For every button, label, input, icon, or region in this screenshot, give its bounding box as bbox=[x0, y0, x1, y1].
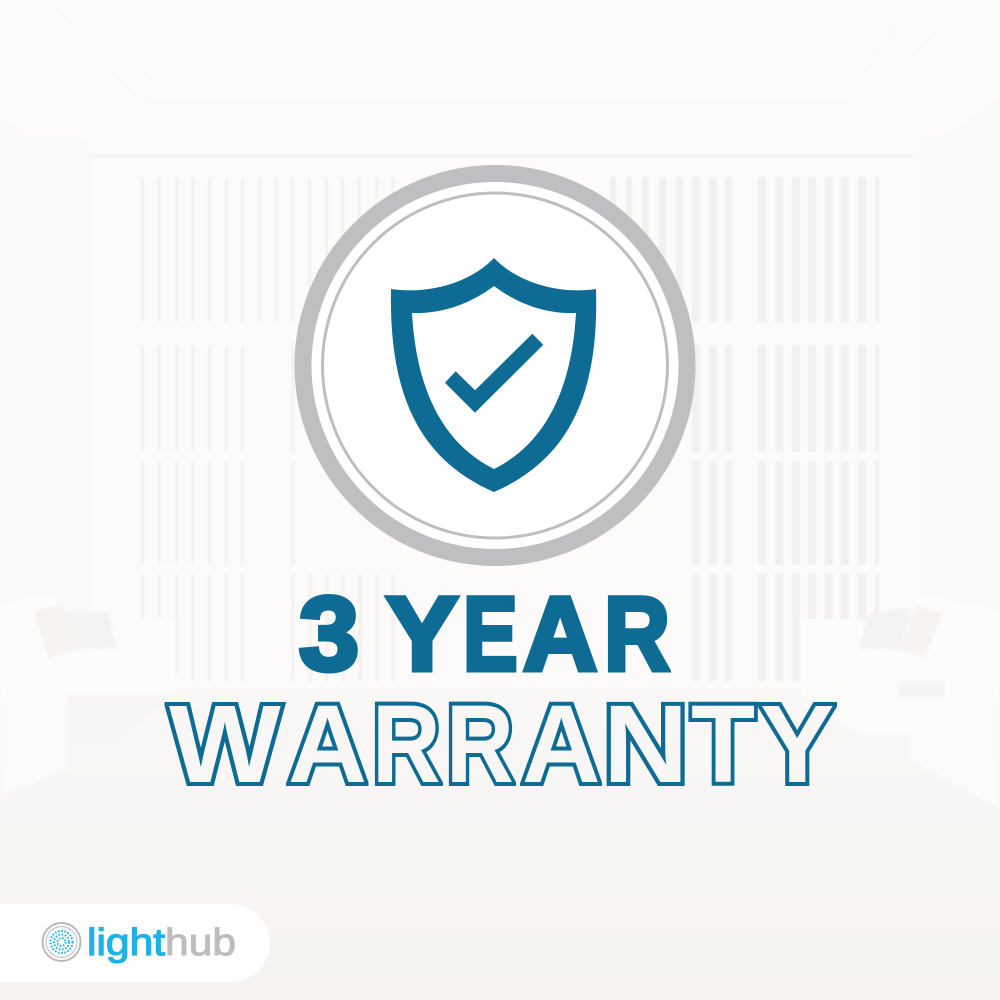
heading: 3 YEAR: Y bbox=[386, 576, 458, 693]
heading: 3 YEAR: 3 bbox=[299, 576, 359, 693]
sofa left bbox=[0, 594, 175, 795]
heading: WARRANTY outlined: N bbox=[603, 682, 689, 806]
heading: WARRANTY outlined: R bbox=[446, 682, 514, 806]
logo wordmark: lighthub bbox=[87, 920, 236, 963]
window blinds right bbox=[610, 177, 879, 681]
heading: 3 YEAR bbox=[298, 576, 671, 693]
floor bbox=[0, 690, 1000, 1000]
heading: WARRANTY outlined: Y bbox=[760, 682, 834, 806]
heading: WARRANTY outlined: R bbox=[372, 682, 440, 806]
curtain rail bbox=[88, 154, 913, 158]
ceiling bbox=[0, 0, 1000, 135]
heading: 3 YEAR: E bbox=[463, 576, 517, 693]
sofa right bbox=[800, 595, 1000, 808]
outer grey ring bbox=[303, 174, 687, 558]
logo pill bbox=[0, 904, 270, 982]
heading: WARRANTY outlined bbox=[164, 682, 837, 806]
badge: circle with shield bbox=[303, 174, 687, 558]
right wall bbox=[920, 98, 1000, 700]
icon: shield with check mark bbox=[391, 258, 596, 492]
left wall bbox=[0, 118, 90, 700]
heading: WARRANTY outlined: A bbox=[288, 682, 367, 806]
icon: lighthub logo mark bbox=[42, 923, 80, 961]
heading: 3 YEAR: R bbox=[604, 576, 670, 693]
heading: WARRANTY outlined: A bbox=[522, 682, 601, 806]
inner thin ring bbox=[322, 193, 668, 538]
heading: 3 YEAR: A bbox=[523, 576, 597, 693]
heading: WARRANTY outlined: W bbox=[169, 682, 281, 806]
window blinds left bbox=[141, 177, 395, 681]
heading: WARRANTY outlined: T bbox=[691, 682, 755, 806]
